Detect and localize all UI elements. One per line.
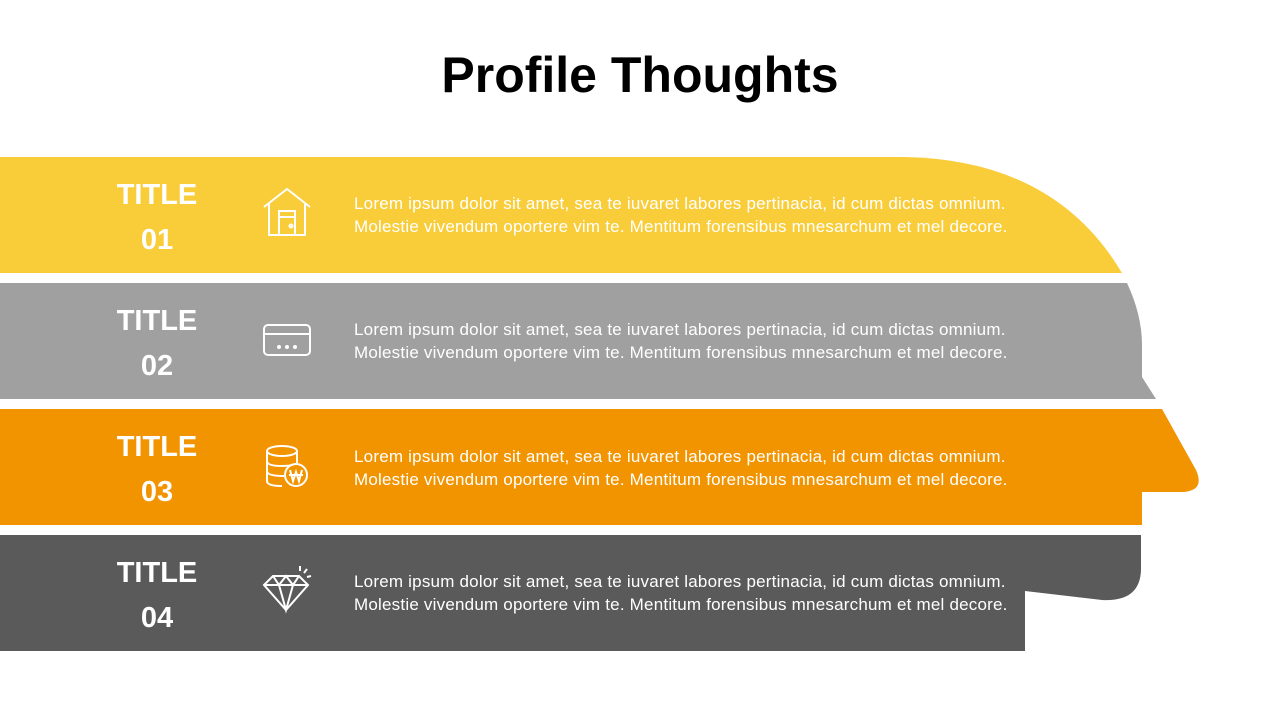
text 02 (354, 320, 1008, 362)
text 03: Lorem ipsum dolor sit amet, sea te iuvaret labores pertinacia, id cum dictas omnium. (354, 447, 1006, 466)
label 04 (117, 557, 197, 634)
text 02: Molestie vivendum oportere vim te. Mentitum forensibus mnesarchum et mel decore. (354, 343, 1008, 362)
text 01 (354, 194, 1008, 236)
label 04: 04 (141, 602, 173, 634)
band 2 gray (0, 283, 1156, 399)
title: Profile Thoughts (441, 47, 839, 103)
label 02: TITLE (117, 305, 197, 337)
label 01: TITLE (117, 179, 197, 211)
icon: house (263, 188, 310, 236)
text 04: Lorem ipsum dolor sit amet, sea te iuvaret labores pertinacia, id cum dictas omnium. (354, 572, 1006, 591)
icon: card (263, 324, 311, 356)
label 01: 01 (141, 224, 173, 256)
text 01: Lorem ipsum dolor sit amet, sea te iuvaret labores pertinacia, id cum dictas omnium. (354, 194, 1006, 213)
label 04: TITLE (117, 557, 197, 589)
text 03: Molestie vivendum oportere vim te. Mentitum forensibus mnesarchum et mel decore. (354, 470, 1008, 489)
band 4 dark gray (0, 535, 1141, 651)
label 01 (117, 179, 197, 256)
icon: coins (266, 445, 308, 487)
label 03: 03 (141, 476, 173, 508)
label 03 (117, 431, 197, 508)
icon: diamond (262, 566, 312, 614)
band 3 orange (0, 409, 1199, 525)
label 02: 02 (141, 350, 173, 382)
text 01: Molestie vivendum oportere vim te. Mentitum forensibus mnesarchum et mel decore. (354, 217, 1008, 236)
band 1 yellow (0, 157, 1122, 273)
text 04 (354, 572, 1008, 614)
label 03: TITLE (117, 431, 197, 463)
label 02 (117, 305, 197, 382)
text 04: Molestie vivendum oportere vim te. Mentitum forensibus mnesarchum et mel decore. (354, 595, 1008, 614)
text 02: Lorem ipsum dolor sit amet, sea te iuvaret labores pertinacia, id cum dictas omnium. (354, 320, 1006, 339)
text 03 (354, 447, 1008, 489)
